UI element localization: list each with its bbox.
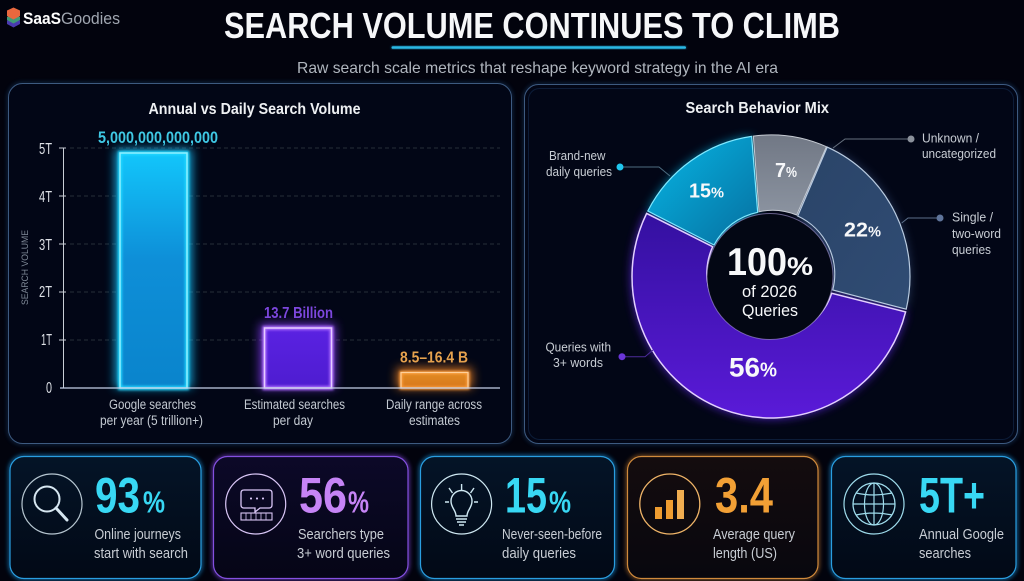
bar: daily range <box>397 350 472 388</box>
slice values: 22 <box>844 220 868 242</box>
x axis labels: per day <box>273 413 313 428</box>
callout: three-plus words <box>546 340 653 370</box>
stat description: start with search <box>94 546 188 562</box>
stat value: 56 <box>299 468 347 524</box>
slice values: % <box>760 360 777 382</box>
slice values: % <box>868 224 881 240</box>
slice values: 15 <box>689 180 711 202</box>
logo: SaaSGoodies: SaaS <box>23 10 61 28</box>
card: 5T+ annual searches <box>832 456 1016 578</box>
x axis labels: estimates <box>409 413 460 428</box>
stat description <box>713 527 796 562</box>
icon: chat and keyboard <box>226 474 286 534</box>
center label: % <box>787 253 813 281</box>
y axis and gridlines: 0 <box>46 380 52 397</box>
callout: single or two-word: queries <box>952 242 991 257</box>
x axis labels: Google searches <box>109 397 196 412</box>
subtitle: Raw search scale metrics that reshape keyword strategy in the AI era <box>297 60 778 77</box>
logo: SaaSGoodies <box>7 8 120 28</box>
stat value: 3.4 <box>715 468 773 524</box>
icon: globe <box>844 474 904 534</box>
bar: daily searches <box>260 305 335 388</box>
stat description: 3+ word queries <box>297 546 390 562</box>
x axis baseline <box>60 387 500 389</box>
center label: of 2026 <box>742 282 797 301</box>
stat description: daily queries <box>502 546 576 562</box>
x axis labels: per year (5 trillion+) <box>100 413 203 428</box>
segment: 7 percent <box>753 135 826 215</box>
card: 15 percent <box>420 456 614 578</box>
stat value: 93 <box>95 468 140 524</box>
slice values: 56 <box>729 352 760 382</box>
stat description: Online journeys <box>94 527 181 543</box>
chart heading: Search Behavior Mix <box>686 100 829 117</box>
icon: signal bars <box>640 474 700 534</box>
title: SEARCH VOLUME CONTINUES TO CLIMB <box>224 5 840 46</box>
chart heading: Annual vs Daily Search Volume <box>148 101 361 118</box>
stat description <box>919 527 1004 562</box>
card: 3.4 average query length <box>628 456 818 578</box>
slice values: % <box>711 184 724 202</box>
bar: daily searches: 13.7 Billion <box>264 305 333 322</box>
x axis labels: Estimated searches <box>244 397 345 412</box>
bar: annual searches <box>98 129 218 388</box>
card: 56 percent <box>214 456 408 578</box>
stat description: Never-seen-before <box>502 527 602 543</box>
y axis and gridlines: 1T <box>41 332 52 349</box>
stat description: Average query <box>713 527 796 543</box>
y axis and gridlines <box>20 141 500 397</box>
stat value: % <box>143 484 165 520</box>
stat description <box>94 527 188 562</box>
callout: brand-new daily queries <box>546 148 670 179</box>
slice values: % <box>786 164 797 181</box>
segment: 15 percent <box>648 136 758 245</box>
stat value: 15 <box>505 468 547 524</box>
stat description: Annual Google <box>919 527 1004 543</box>
stat value: % <box>549 484 571 520</box>
stat description <box>502 527 602 562</box>
slice values <box>689 160 881 382</box>
center label: 100 <box>727 241 787 284</box>
segment: 22 percent <box>798 147 910 309</box>
callout: unknown: uncategorized <box>922 146 996 161</box>
y axis and gridlines: 4T <box>39 189 52 206</box>
callout: single or two-word: Single / <box>952 210 993 224</box>
bar: annual searches: 5,000,000,000,000 <box>98 129 218 147</box>
y axis and gridlines: 3T <box>39 237 52 254</box>
title underline <box>392 46 686 49</box>
y axis and gridlines: 2T <box>39 284 52 301</box>
icon: magnifying glass <box>22 474 82 534</box>
stat description: length (US) <box>713 546 777 562</box>
callout: three-plus words: 3+ words <box>553 355 603 370</box>
callout: unknown: Unknown / <box>922 130 979 146</box>
callout: brand-new daily queries: Brand-new <box>549 148 606 163</box>
center label: Queries <box>742 301 798 320</box>
y axis and gridlines: SEARCH VOLUME <box>20 230 31 305</box>
center hole <box>707 214 833 340</box>
stat description <box>297 527 390 562</box>
logo: SaaSGoodies: Goodies <box>61 10 120 28</box>
callout: single or two-word: two-word <box>952 226 1001 241</box>
stat value: % <box>348 484 369 520</box>
stat description: Searchers type <box>298 527 384 543</box>
bar: daily range: 8.5–16.4 B <box>400 350 468 366</box>
card: 93 percent <box>10 456 201 578</box>
callout: single or two-word <box>902 210 1001 257</box>
callout: brand-new daily queries: daily queries <box>546 164 612 179</box>
y axis and gridlines: 5T <box>39 141 52 158</box>
x axis labels: Daily range across <box>386 397 482 412</box>
callout: unknown <box>833 130 996 161</box>
panel: annual vs daily search volume <box>8 84 512 444</box>
icon: light bulb <box>432 474 492 534</box>
panel: search behavior mix <box>524 84 1018 444</box>
donut chart <box>632 135 910 418</box>
stat description: searches <box>919 546 971 562</box>
slice values: 7 <box>775 160 786 182</box>
center label <box>727 241 813 320</box>
callout: three-plus words: Queries with <box>546 340 611 354</box>
stat value: 5T+ <box>919 468 985 524</box>
x axis labels <box>100 397 482 428</box>
segment: 56 percent <box>632 213 906 418</box>
